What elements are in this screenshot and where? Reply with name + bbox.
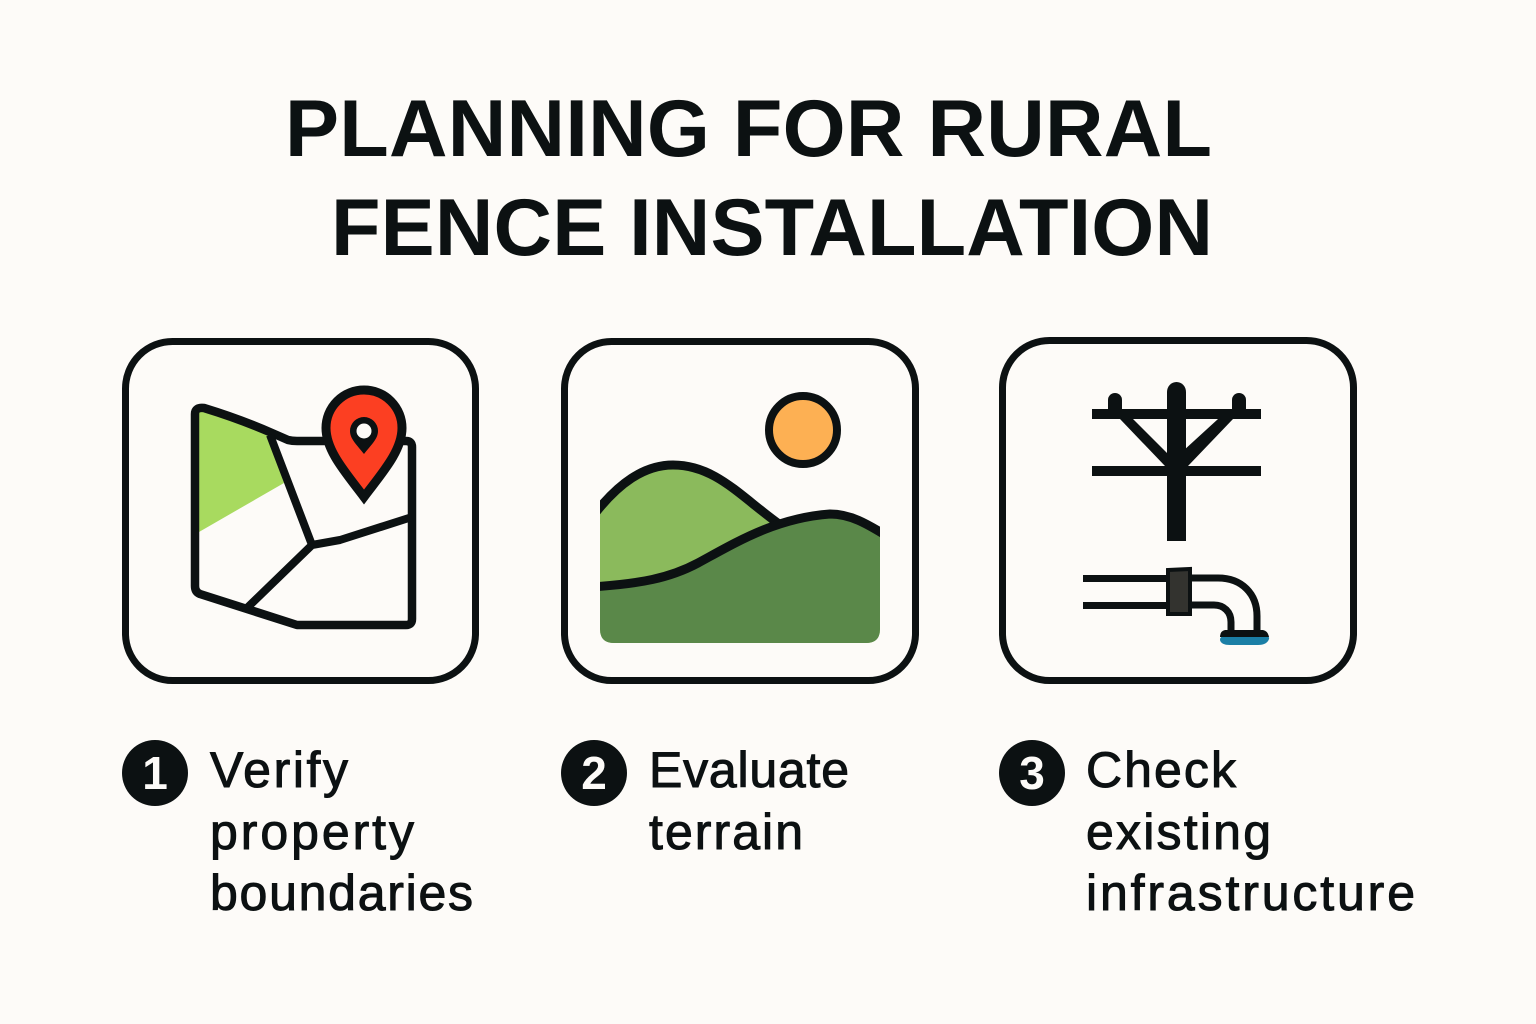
step 1 text	[210, 742, 473, 921]
step 2 text: terrain	[649, 804, 803, 860]
icon: parcel map with location pin	[195, 390, 412, 625]
step 1 text: boundaries	[210, 865, 473, 921]
step 1 label	[122, 740, 473, 921]
icon: sun	[769, 396, 837, 464]
title	[285, 84, 1213, 273]
icon: hills and sun	[590, 396, 890, 643]
step 3 text: infrastructure	[1086, 865, 1415, 921]
step 2 text: Evaluate	[649, 742, 849, 798]
step 2 label	[561, 740, 849, 860]
infographic	[122, 100, 1414, 911]
step 1 text: property	[210, 804, 414, 860]
icon: utility pole	[1092, 382, 1261, 541]
title: PLANNING FOR RURAL	[285, 84, 1212, 174]
panel: evaluate terrain	[564, 342, 916, 680]
panel: verify property boundaries	[126, 342, 476, 680]
card outline	[564, 342, 916, 680]
number badge 1: 1	[142, 747, 168, 799]
icon: water pipe	[1083, 569, 1269, 645]
title: FENCE INSTALLATION	[331, 183, 1213, 273]
step 3 text	[1086, 742, 1415, 921]
number badge 2	[561, 740, 627, 806]
step 3 text: existing	[1086, 804, 1271, 860]
card outline	[126, 342, 476, 680]
step 2 text	[649, 742, 849, 860]
card outline	[1002, 340, 1354, 680]
number badge 2: 2	[581, 747, 607, 799]
number badge 3	[999, 740, 1065, 806]
icon: location pin	[326, 390, 402, 497]
step 3 text: Check	[1086, 742, 1237, 798]
panel: check existing infrastructure	[1002, 340, 1354, 680]
step 3 label	[999, 740, 1415, 921]
number badge 3: 3	[1019, 747, 1045, 799]
number badge 1	[122, 740, 188, 806]
step 1 text: Verify	[210, 742, 348, 798]
